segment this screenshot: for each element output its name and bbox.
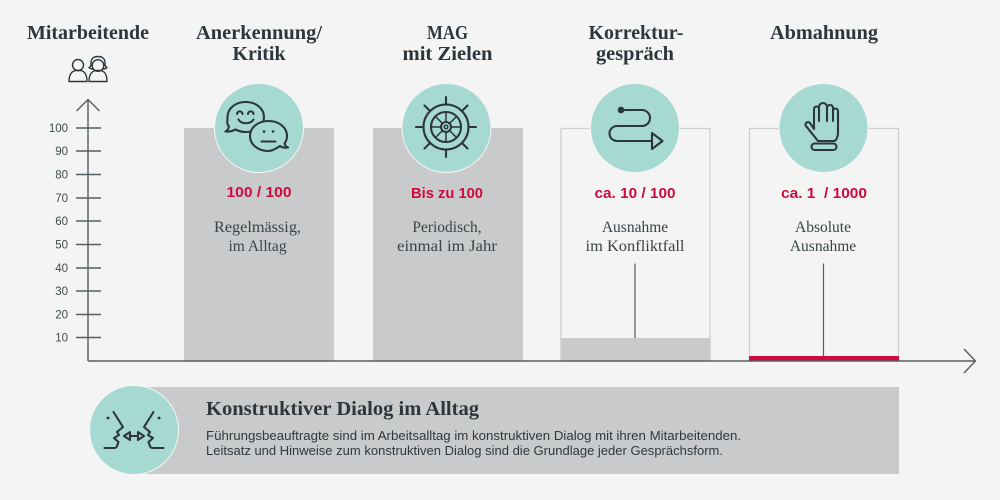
y axis labels: 40 [55,263,68,275]
heading: Korrekturgespräch [588,23,684,65]
description: im Alltag [228,238,287,255]
value: Bis zu 100 [411,186,483,202]
description [586,219,684,255]
heading: Korrekturgespräch: gespräch [596,44,674,65]
description [790,219,856,255]
column: Abmahnung [749,23,899,361]
y axis labels: 80 [55,170,68,182]
heading: Anerkennung/Kritik: Anerkennung/ [196,23,323,44]
y axis labels: 70 [55,193,68,205]
icon: chat bubbles [226,102,288,151]
bar: 10 of 100 [560,338,710,361]
panel text: Führungsbeauftragte sind im Arbeitsalltag im konstruktiven Dialog mit ihren Mitarbeitenden. [206,429,741,443]
x axis [88,349,976,373]
connector line [822,264,824,356]
icon: raised hand [805,103,838,150]
connector line [634,264,636,338]
circle [779,84,868,172]
description: Regelmässig, [214,219,301,236]
circle [402,84,491,172]
description: Ausnahme [602,219,668,236]
y axis labels: 10 [55,332,68,344]
y axis labels: 30 [55,286,68,298]
circle [590,84,680,172]
heading: MAG mit Zielen: MAG [427,23,468,44]
description: im Konfliktfall [586,238,684,255]
y axis labels: 20 [55,310,68,322]
heading: Abmahnung: Abmahnung [770,23,878,44]
y axis [76,100,101,361]
bar outline [561,128,710,360]
description: Periodisch, [412,219,482,236]
bar: 100 of 100 [184,128,334,361]
icon: people [69,56,107,82]
description [214,219,301,255]
column: Anerkennung/Kritik [184,23,334,361]
icon: two faces in dialog [104,412,164,448]
panel text: Leitsatz und Hinweise zum konstruktiven Dialog sind die Grundlage jeder Gesprächsform. [206,444,723,458]
value: ca. 10 / 100 [594,186,676,202]
description: Absolute [795,219,851,236]
icon: winding arrow [610,108,662,149]
bar: up to 100 [373,128,523,361]
heading: MAG mit Zielen: mit Zielen [402,44,493,65]
heading: Anerkennung/Kritik: Kritik [232,44,286,65]
description: einmal im Jahr [397,238,498,255]
heading: Anerkennung/Kritik [196,23,323,65]
description [397,219,498,255]
column: Korrekturgespräch [560,23,710,361]
heading: MAG mit Zielen [402,23,493,65]
y axis labels: 60 [55,216,68,228]
value: 100 / 100 [226,185,292,201]
y axis labels: 50 [55,240,68,252]
panel background [134,387,899,474]
y axis labels [49,123,68,344]
y axis labels: 100 [49,123,68,135]
panel heading: Konstruktiver Dialog im Alltag [206,398,479,420]
bar: 1 of 1000 [749,356,899,361]
y axis labels: 90 [55,146,68,158]
circle [90,386,178,474]
column: MAG mit Zielen [373,23,523,361]
heading: Mitarbeitende: Mitarbeitende [27,23,149,44]
bar outline [750,128,898,360]
panel text [206,429,741,458]
panel: Konstruktiver Dialog [90,386,899,474]
icon: ship wheel [416,97,476,157]
value: ca. 1 / 1000 [781,186,867,202]
heading: Korrekturgespräch: Korrektur- [588,23,684,44]
circle [214,84,304,172]
description: Ausnahme [790,238,856,255]
